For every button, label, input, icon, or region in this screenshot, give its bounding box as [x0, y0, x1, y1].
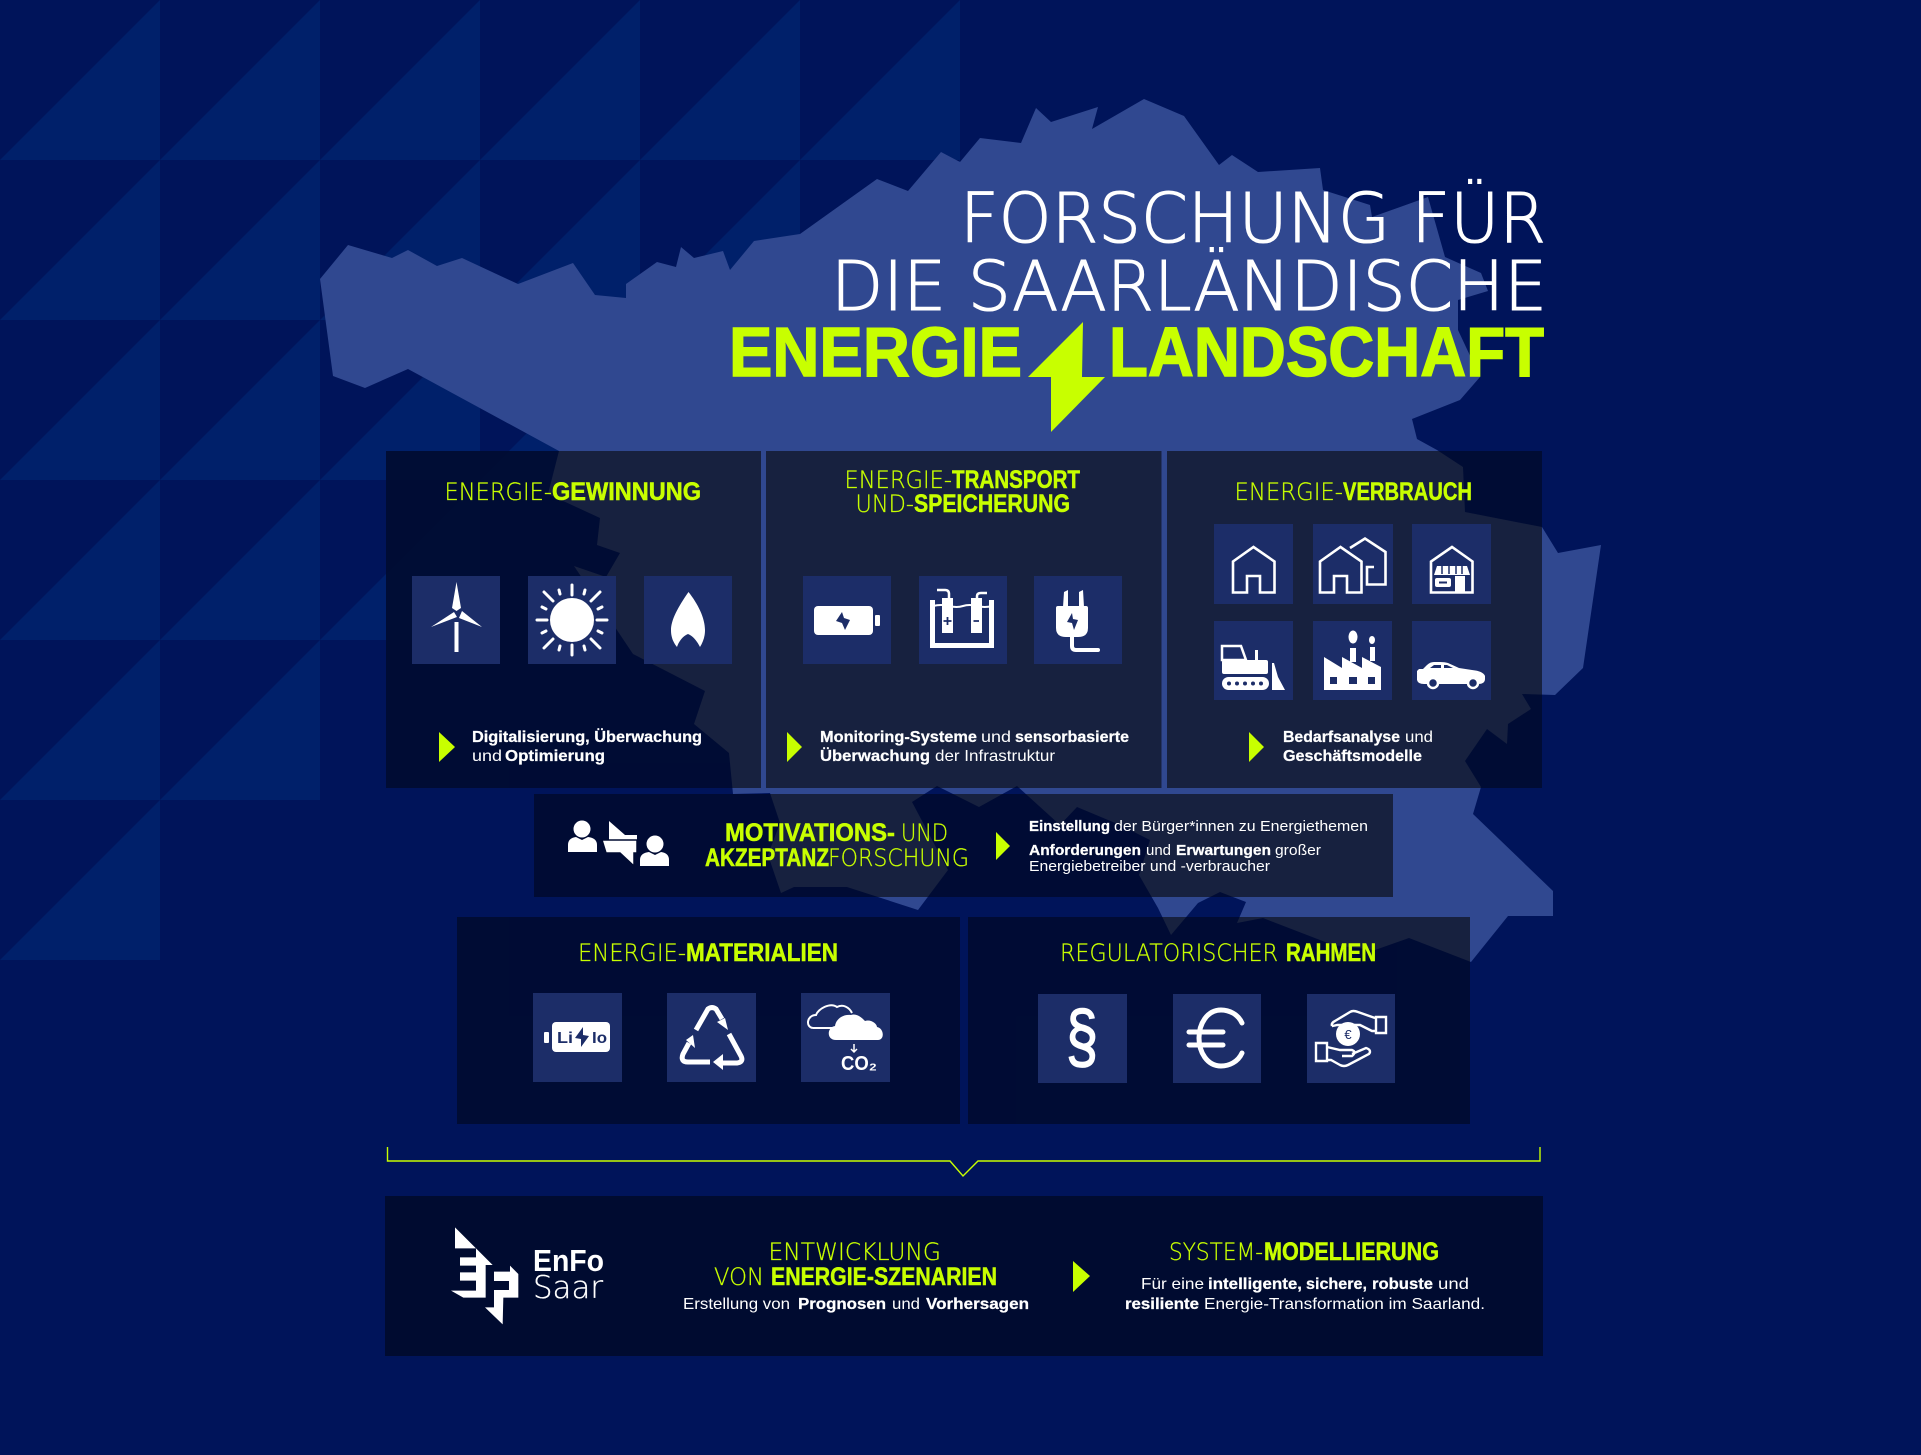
text block: und: [1405, 729, 1433, 746]
text block: [1029, 818, 1368, 875]
scenario text: Erstellung von: [683, 1296, 790, 1313]
icon: paragraph sign: [1038, 994, 1127, 1083]
heading: REGULATORISCHER: [1060, 939, 1278, 967]
modelling text: Energie-Transformation im Saarland.: [1204, 1296, 1485, 1313]
heading: ENERGIE-: [444, 478, 552, 506]
logo mark: [451, 1227, 518, 1324]
icon: lightning bolt: [1028, 322, 1105, 432]
icon: car: [1412, 621, 1491, 700]
text block: Optimierung: [505, 748, 605, 765]
icon: paragraph sign: §: [1066, 997, 1098, 1077]
scenario text: ENTWICKLUNG: [768, 1238, 941, 1266]
scenario text: [683, 1238, 1029, 1313]
scenario text: ENERGIE-SZENARIEN: [771, 1263, 997, 1291]
heading: RAHMEN: [1286, 939, 1376, 967]
logo: EnFo Saar: [451, 1227, 604, 1324]
icon: wind turbine: [412, 576, 500, 664]
scenario text: und: [892, 1296, 920, 1313]
panel: Energie-Materialien: [457, 917, 960, 1124]
icon: people talking: [568, 820, 669, 866]
scenario text: Vorhersagen: [926, 1296, 1029, 1313]
heading: TRANSPORT: [952, 466, 1080, 494]
arrow: [1249, 732, 1264, 762]
arrow: [996, 832, 1010, 860]
modelling text: MODELLIERUNG: [1264, 1238, 1439, 1266]
modelling text: und: [1438, 1276, 1469, 1293]
icon: Li-Ion battery: Io: [592, 1030, 607, 1047]
text block: und: [1146, 842, 1171, 859]
modelling text: Für eine: [1141, 1276, 1204, 1293]
text block: Geschäftsmodelle: [1283, 748, 1422, 765]
heading: [444, 478, 701, 506]
text block: [1283, 729, 1433, 765]
panel: Motivations- und Akzeptanzforschung: [534, 794, 1393, 897]
heading: ENERGIE-: [844, 466, 952, 494]
text block: Monitoring-Systeme: [820, 729, 977, 746]
text block: Erwartungen: [1176, 842, 1271, 859]
panel: bottom summary: [385, 1196, 1543, 1356]
modelling text: sichere,: [1306, 1276, 1367, 1293]
heading: [578, 939, 838, 967]
arrow: [1073, 1261, 1090, 1292]
text block: Bedarfsanalyse: [1283, 729, 1400, 746]
modelling text: intelligente,: [1208, 1276, 1302, 1293]
icon: battery: [803, 576, 891, 664]
icon: bulldozer: [1214, 621, 1293, 700]
title line 2: DIE SAARLÄNDISCHE: [831, 246, 1547, 327]
text block: Anforderungen: [1029, 842, 1141, 859]
logo: EnFo Saar: Saar: [533, 1270, 603, 1306]
text block: der Infrastruktur: [935, 748, 1056, 765]
title line 1: FORSCHUNG FÜR: [960, 178, 1546, 259]
text block: Energiebetreiber und -verbraucher: [1029, 858, 1270, 875]
panel: Energie-Gewinnung: [386, 451, 761, 788]
modelling text: resiliente: [1125, 1296, 1199, 1313]
text block: der Bürger*innen zu Energiethemen: [1114, 818, 1368, 835]
heading: ENERGIE-: [578, 939, 686, 967]
icon: Li-Ion battery: Li: [557, 1030, 573, 1047]
heading: UND: [901, 819, 948, 847]
icon: cloud with CO2: CO₂: [841, 1053, 877, 1075]
panel: Regulatorischer Rahmen: [968, 917, 1470, 1124]
panel: Energie-Verbrauch: [1167, 451, 1542, 788]
text block: und: [472, 748, 502, 765]
bracket arrow: [388, 1147, 1540, 1176]
text block: Einstellung: [1029, 818, 1110, 835]
icon: sun: [528, 576, 616, 664]
icon: factory: [1313, 621, 1392, 700]
title word: Landschaft: LANDSCHAFT: [1109, 313, 1544, 391]
icon: plug: [1034, 576, 1122, 664]
heading: [1234, 478, 1472, 506]
heading: UND-: [856, 490, 914, 518]
heading: AKZEPTANZ: [705, 844, 829, 872]
text block: und: [981, 729, 1011, 746]
heading: ENERGIE-: [1234, 478, 1343, 506]
heading: [705, 819, 969, 872]
heading: SPEICHERUNG: [914, 490, 1070, 518]
background triangle pattern: [0, 0, 960, 960]
title word: Energie: ENERGIE: [729, 313, 1022, 391]
arrow: [787, 732, 802, 762]
icon: gas flame: [644, 576, 732, 664]
text block: sensorbasierte: [1015, 729, 1129, 746]
heading: MATERIALIEN: [686, 939, 838, 967]
scenario text: VON: [714, 1263, 764, 1291]
text block: [472, 727, 702, 765]
heading: FORSCHUNG: [828, 844, 969, 872]
icon: hands with coin: [1307, 994, 1395, 1083]
heading: MOTIVATIONS-: [725, 819, 895, 847]
heading: VERBRAUCH: [1343, 478, 1472, 506]
text block: großer: [1275, 842, 1321, 859]
icon: recycling: [667, 993, 756, 1082]
text block: Digitalisierung, Überwachung: [472, 727, 702, 746]
heading: [844, 466, 1080, 518]
modelling text: SYSTEM-: [1169, 1238, 1263, 1266]
icon: cloud with CO2: [801, 993, 890, 1082]
icon: house: [1214, 524, 1293, 604]
title: [729, 178, 1547, 432]
icon: shop: [1412, 524, 1491, 604]
text block: Überwachung: [820, 746, 930, 765]
modelling text: robuste: [1372, 1276, 1433, 1293]
text block: [820, 729, 1129, 765]
panel: Energie-Transport und -Speicherung: [766, 451, 1162, 788]
icon: Li-Ion battery: [533, 993, 622, 1082]
Saarland map silhouette: [320, 99, 1601, 962]
icon: euro sign: [1173, 994, 1261, 1083]
scenario text: Prognosen: [798, 1296, 886, 1313]
icon: two houses: [1313, 524, 1393, 604]
heading: GEWINNUNG: [552, 478, 701, 506]
logo text: EnFo: [533, 1243, 604, 1278]
modelling text: [1125, 1238, 1485, 1313]
icon: electrolysis cell: [919, 576, 1007, 664]
icon: hands with coin: €: [1344, 1027, 1352, 1042]
arrow: [439, 732, 455, 762]
